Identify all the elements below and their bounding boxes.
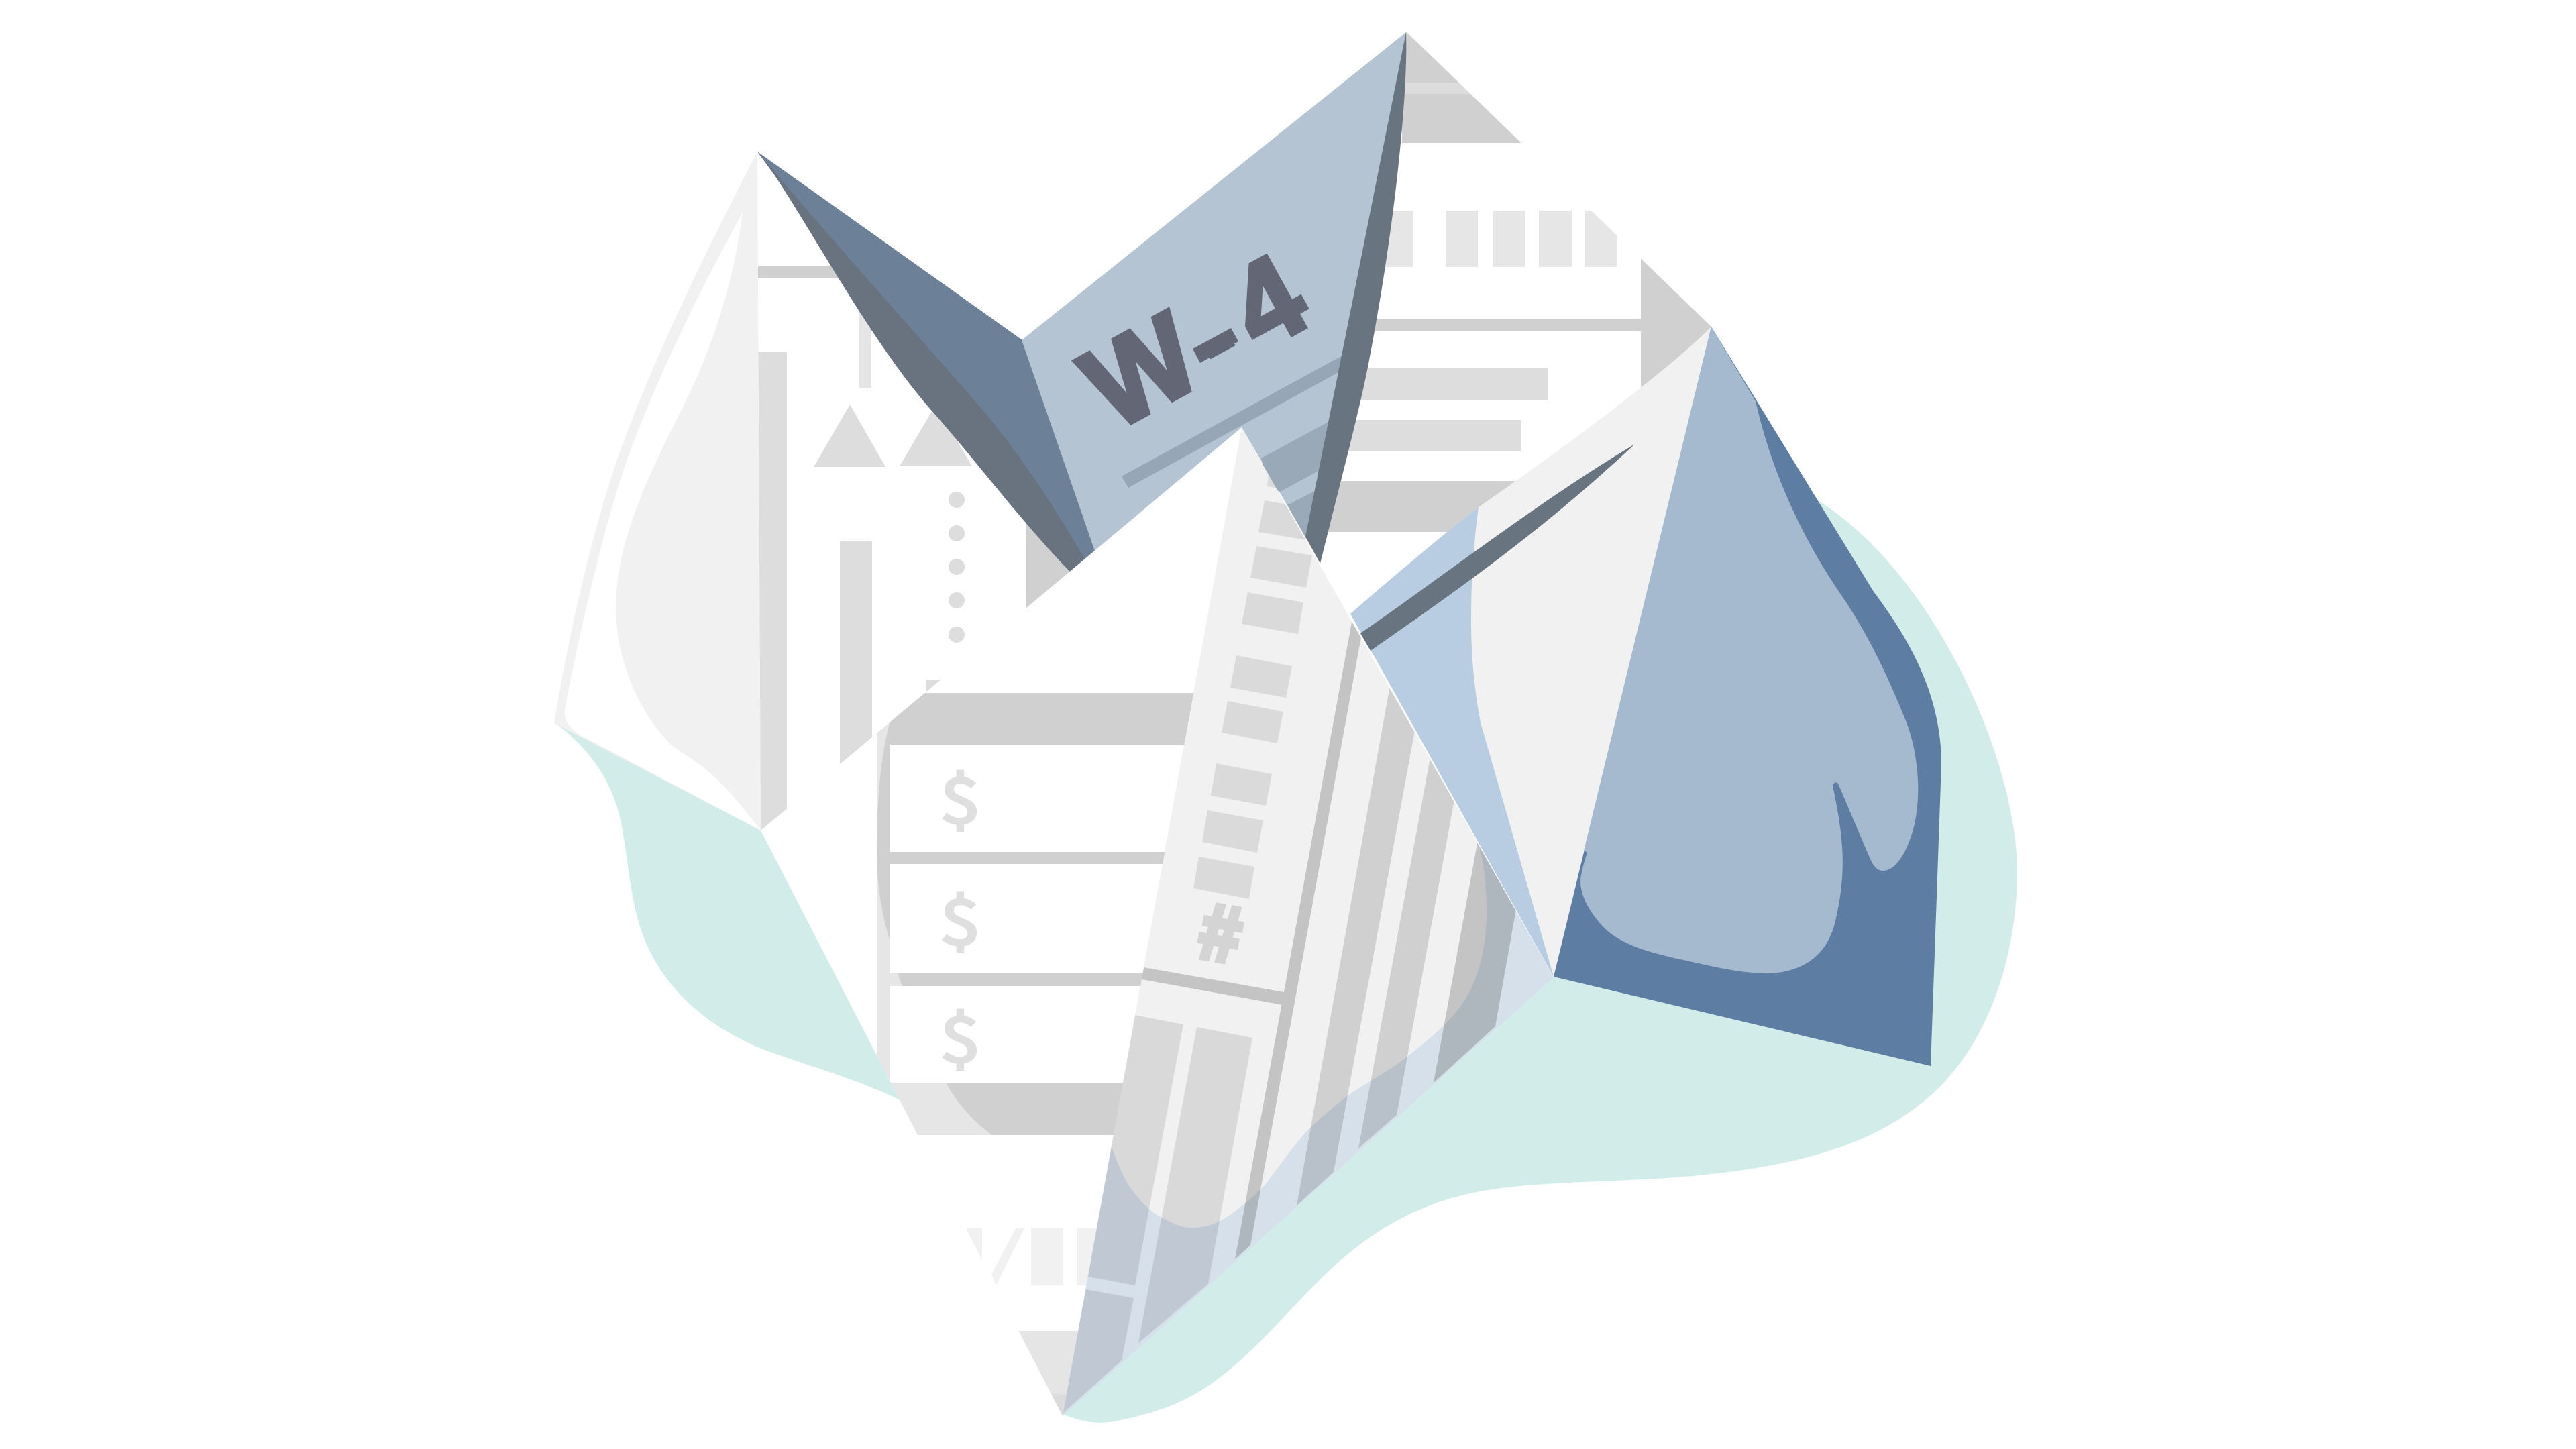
- hash symbol: #: [1190, 871, 1252, 986]
- pale blue fold: [1350, 507, 1554, 977]
- dark spine fold: [1305, 32, 1406, 564]
- front centre panel: [1062, 427, 1554, 1416]
- back form panel: left: [758, 266, 1069, 830]
- blue shadow overlay: [1063, 840, 1554, 1416]
- left sail flap: [554, 152, 761, 830]
- right cream fold: [1350, 327, 1711, 977]
- row 3: [890, 986, 1140, 1083]
- right back form panel: [1315, 32, 1711, 970]
- W-4 heading: 4: [1209, 229, 1327, 374]
- lower strips: [1261, 421, 1330, 492]
- light blue W-4 flap: [1022, 32, 1406, 551]
- row 1: [890, 745, 1185, 852]
- dark sliver: [1360, 444, 1635, 651]
- dark blue right flap: [1554, 327, 1941, 1066]
- dark blue back fold: [757, 152, 1095, 572]
- lower panel boxes: [1087, 1015, 1183, 1285]
- teal background blob: [555, 500, 2017, 1423]
- dollar sign 3: $: [940, 990, 980, 1080]
- panel small rows: [1193, 470, 1312, 899]
- dollar sign 1: $: [940, 751, 980, 841]
- small strip triangle: [1287, 491, 1315, 539]
- illustration: folded W-4 form: [554, 32, 2017, 1423]
- W-4 heading: W: [1063, 288, 1219, 454]
- vertical divider stripe: [1235, 619, 1362, 1259]
- W-4 heading: [1063, 229, 1330, 460]
- row 2: [890, 864, 1163, 973]
- lower form blocks: [967, 1228, 1110, 1285]
- row shadow: [877, 693, 1228, 1135]
- bottom band: [1018, 1331, 1078, 1394]
- light blue right flap overlay: [1580, 327, 1918, 973]
- white front-left flap with dollar rows: [761, 427, 1242, 1421]
- dollar sign 2: $: [940, 873, 980, 963]
- panel divider bar: [1142, 967, 1284, 1005]
- long stripes: [1297, 686, 1415, 1205]
- W-4 heading: -: [1167, 272, 1263, 404]
- underline strip: [1122, 356, 1342, 488]
